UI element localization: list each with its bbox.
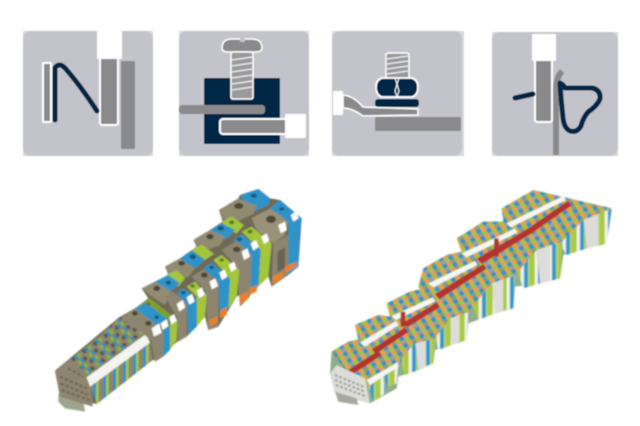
panel: push-in spring connection icon [23, 31, 153, 156]
product photo: grey green blue terminal block assembly with red jumpers [330, 190, 612, 405]
module 3 faces [492, 276, 515, 313]
module 6 faces [383, 362, 398, 388]
big tan and blue terminal [288, 235, 299, 275]
top surface [332, 190, 612, 387]
group 5 front [242, 227, 272, 287]
product photo: tan blue green terminal block assembly [55, 189, 302, 412]
module 2 faces [537, 243, 562, 283]
body backing [330, 190, 612, 403]
group 3 [167, 270, 185, 287]
back top block [240, 189, 270, 212]
module 4 faces [450, 313, 468, 345]
red jumper bars [527, 201, 572, 233]
rail foot [58, 393, 85, 412]
group 4 [192, 244, 214, 260]
small terminals body [90, 343, 153, 404]
group 5 back row [222, 217, 244, 233]
panel: bolt and ring lug connection icon [332, 31, 464, 156]
module 5 faces [415, 336, 435, 370]
panel: spring cage connection icon [492, 32, 618, 156]
panel: screw clamp connection icon [179, 31, 309, 156]
body backing [55, 189, 302, 404]
module 1 faces [583, 209, 612, 248]
group 2 [170, 320, 177, 350]
grey end plate [330, 365, 370, 403]
white label strips [507, 196, 566, 227]
